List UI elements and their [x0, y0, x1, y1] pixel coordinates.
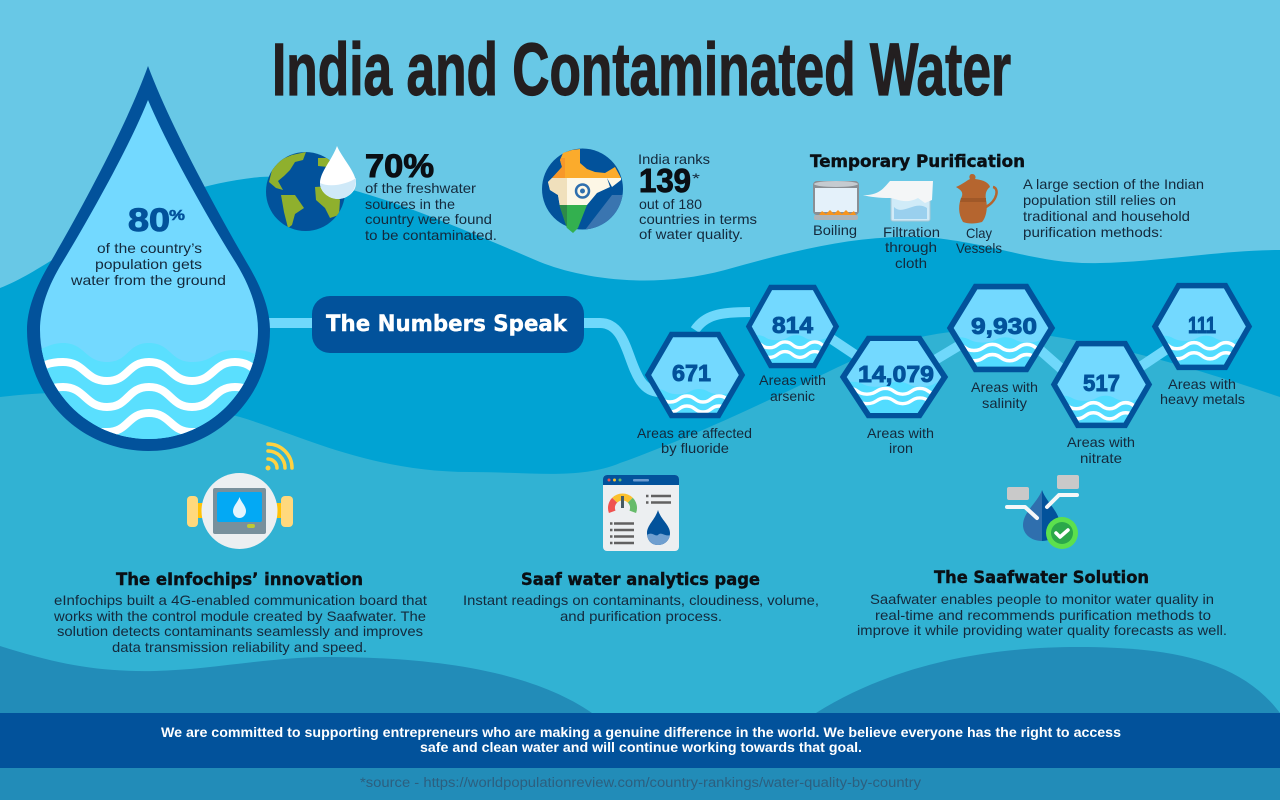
purification description: population still relies on	[1023, 192, 1176, 208]
panel: analytics page: Instant readings on contaminants, cloudiness, volume,	[463, 592, 819, 608]
drop text: water from the ground	[70, 272, 226, 288]
stat: rank 139: of water quality.	[639, 226, 743, 242]
banner: commitment statement	[0, 713, 1280, 768]
footer: source	[0, 768, 1280, 800]
panel: analytics page: and purification process.	[560, 608, 722, 624]
hexagon: 14,079 iron: iron	[889, 440, 913, 456]
hexagon: 517 nitrate: nitrate	[1080, 450, 1122, 466]
stat: rank 139	[638, 151, 757, 242]
pill heading: the numbers speak	[312, 296, 584, 353]
icon: saafwater device drop	[1007, 475, 1079, 549]
clay vessels label	[956, 225, 1002, 256]
icon: India map flag	[542, 148, 625, 235]
drop fill	[40, 100, 258, 439]
icon: clay vessel	[956, 174, 997, 224]
drop figure: 80	[128, 202, 170, 238]
panel: the saafwater solution: real-time and recommends purification methods to	[875, 607, 1211, 623]
hexagon: 9,930 salinity: 9,930	[971, 313, 1037, 339]
drop text	[70, 240, 226, 288]
stat: rank 139: *	[692, 170, 701, 186]
icon: analytics dashboard	[603, 475, 679, 551]
stat: 70 percent: 70%	[365, 148, 434, 184]
hexagon: 814 arsenic: arsenic	[770, 388, 815, 404]
panel: eInfochips innovation: The eInfochips’ innovation	[116, 570, 363, 589]
hexagon: 111 heavy metals: heavy metals	[1160, 391, 1245, 407]
cloth filtration label: cloth	[895, 255, 927, 271]
panel: the saafwater solution: improve it while providing water quality forecasts as well.	[857, 622, 1227, 638]
footer: source: *source - https://worldpopulationreview.com/country-rankings/water-quality-by-country	[360, 775, 921, 790]
clay vessels label: Clay	[966, 225, 992, 241]
panel: eInfochips innovation: eInfochips built a 4G-enabled communication board that	[54, 592, 427, 608]
panel: eInfochips innovation: works with the control module created by Saafwater. The	[53, 608, 426, 624]
hexagon: 814 arsenic	[746, 287, 839, 404]
panel: the saafwater solution: Saafwater enables people to monitor water quality in	[870, 591, 1214, 607]
background wave: bottom right hill	[816, 647, 1280, 713]
hexagon: 111 heavy metals: 111	[1188, 312, 1216, 338]
panel: eInfochips innovation: solution detects contaminants seamlessly and improves	[57, 623, 423, 639]
icon: water meter with wifi	[187, 444, 293, 549]
panel: the saafwater solution: The Saafwater Solution	[934, 568, 1149, 587]
hexagon: 517 nitrate: Areas with	[1067, 434, 1135, 450]
stat: 70 percent: to be contaminated.	[365, 227, 497, 243]
hexagon: 814 arsenic: 814	[772, 312, 813, 338]
boiling label: Boiling	[813, 222, 857, 238]
hexagon: 9,930 salinity	[947, 287, 1055, 411]
stat: 70 percent: sources in the	[365, 196, 455, 212]
cloth filtration label	[883, 224, 940, 271]
stat: 70 percent: of the freshwater	[365, 180, 476, 196]
hexagon: 14,079 iron: Areas with	[867, 425, 934, 441]
panel: temporary purification	[810, 152, 1204, 271]
drop text: of the country’s	[97, 240, 202, 256]
hexagon: 9,930 salinity: Areas with	[971, 379, 1038, 395]
background wave: bottom left hill	[0, 646, 592, 713]
water drop: 80 percent	[20, 66, 280, 451]
stat: rank 139: 139	[639, 162, 691, 199]
stat: 70 percent: country were found	[365, 211, 492, 227]
stat: rank 139: India ranks	[638, 151, 710, 167]
panel: eInfochips innovation: data transmission reliability and speed.	[112, 639, 367, 655]
hexagon: 111 heavy metals: Areas with	[1168, 376, 1236, 392]
drop figure: %	[169, 207, 185, 224]
drop water waves	[42, 343, 256, 439]
hexagon: 111 heavy metals	[1152, 286, 1252, 407]
panel: analytics page	[463, 570, 819, 624]
heading: Temporary Purification	[810, 152, 1025, 171]
hexagon: 9,930 salinity: salinity	[982, 395, 1027, 411]
hexagon: 517 nitrate	[1051, 344, 1152, 466]
hexagon: 671 fluoride: by fluoride	[661, 440, 729, 456]
cloth filtration label: through	[885, 239, 937, 255]
panel: eInfochips innovation	[53, 570, 427, 655]
stat: rank 139: countries in terms	[639, 211, 757, 227]
background wave: lower	[0, 330, 1280, 800]
hexagon: 671 fluoride	[637, 334, 752, 456]
drop outline	[27, 66, 270, 451]
icon: boiling pot	[813, 181, 859, 220]
drop figure	[128, 202, 185, 238]
background wave: middle	[0, 177, 1280, 800]
cloth filtration label: Filtration	[883, 224, 940, 240]
connector tube	[265, 312, 1170, 392]
hexagon: 671 fluoride: 671	[672, 360, 711, 386]
panel: analytics page: Saaf water analytics page	[521, 570, 760, 589]
banner: commitment statement: We are committed to supporting entrepreneurs who are making a genuine difference in the world. We believe everyone has the right to access	[161, 725, 1121, 740]
purification description	[1023, 176, 1204, 240]
stat: rank 139: out of 180	[639, 196, 702, 212]
stat: 70 percent	[365, 148, 497, 243]
hexagon: 14,079 iron: 14,079	[858, 361, 934, 387]
hexagon: 517 nitrate: 517	[1083, 370, 1120, 396]
icon: globe with drop	[266, 146, 356, 231]
purification description: A large section of the Indian	[1023, 176, 1204, 192]
hexagon: 814 arsenic: Areas with	[759, 372, 826, 388]
hexagon: 14,079 iron	[840, 338, 948, 456]
icon: cloth over glass	[863, 181, 933, 221]
pill heading: the numbers speak: The Numbers Speak	[326, 312, 568, 337]
banner: commitment statement: safe and clean water and will continue working towards that goal.	[420, 740, 862, 755]
purification description: purification methods:	[1023, 224, 1163, 240]
drop text: population gets	[95, 256, 202, 272]
hexagon: 671 fluoride: Areas are affected	[637, 425, 752, 441]
purification description: traditional and household	[1023, 208, 1190, 224]
panel: the saafwater solution	[857, 568, 1227, 638]
clay vessels label: Vessels	[956, 240, 1002, 256]
